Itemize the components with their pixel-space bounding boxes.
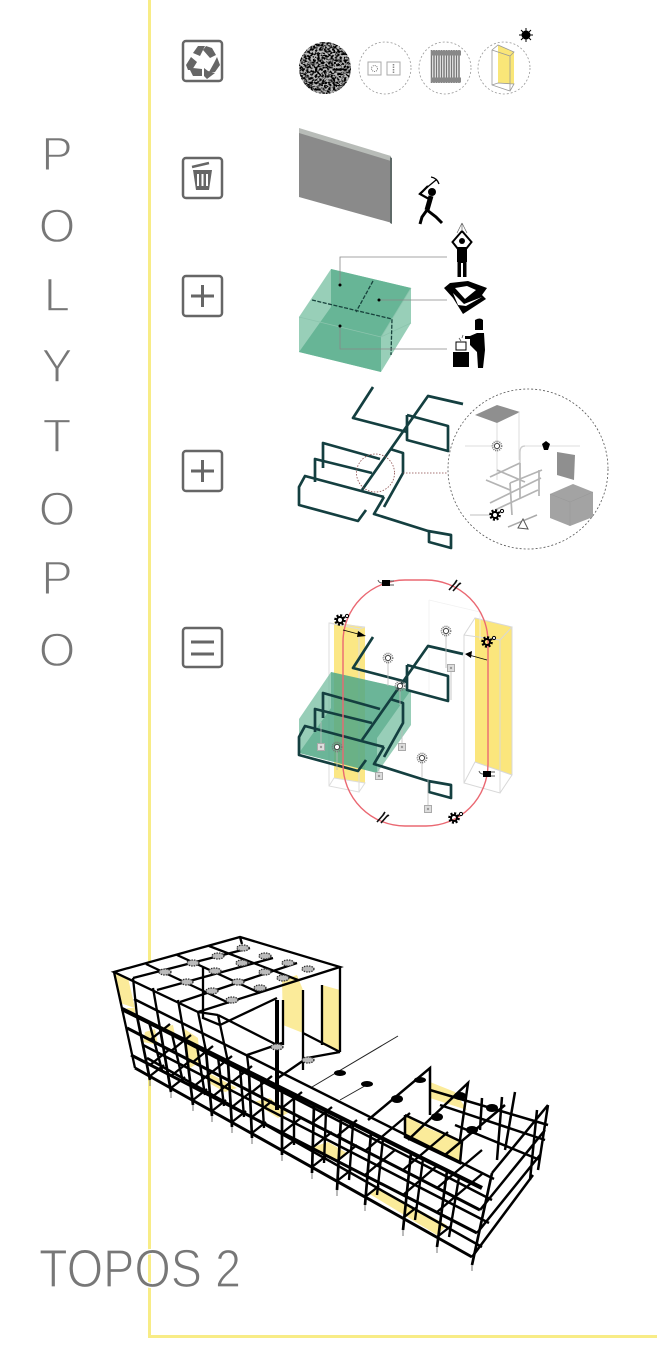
circle: sockets bbox=[359, 42, 411, 94]
icon: worker with pickaxe bbox=[419, 177, 442, 224]
title TOPOS 2: TOPOS 2 bbox=[39, 1239, 241, 1299]
building: roof equipment units bbox=[159, 945, 314, 1063]
combined diagram: red service loop bbox=[343, 580, 488, 826]
vertical title POLYTOPO: T bbox=[43, 409, 71, 462]
yellow frame line bbox=[150, 0, 657, 1336]
building: right wing frame bbox=[368, 1068, 548, 1257]
building: white mask over frame line bbox=[114, 937, 340, 1076]
green program volume with leader lines bbox=[299, 257, 447, 372]
combined diagram: green volume bbox=[299, 672, 411, 773]
building: roof grid bbox=[114, 937, 340, 1068]
building axonometric bbox=[114, 937, 548, 1271]
circle: radiator bbox=[419, 42, 471, 94]
combined diagram: pipe network bbox=[299, 637, 463, 798]
building: upper block columns bbox=[133, 978, 340, 1078]
combined diagram: service icons bbox=[318, 580, 496, 823]
building: rear columns bbox=[149, 1022, 459, 1237]
building: column stubs bbox=[150, 1080, 472, 1271]
vertical title POLYTOPO: P bbox=[41, 127, 73, 180]
dashed detail connector bbox=[356, 454, 448, 492]
pipe network bbox=[299, 387, 463, 548]
circle: solar column bbox=[478, 42, 530, 94]
icon: plus bbox=[183, 276, 222, 316]
building: main level beams bbox=[122, 1009, 482, 1188]
vertical title POLYTOPO: P bbox=[41, 551, 73, 604]
icon: recycle bbox=[183, 41, 222, 81]
building: front columns bbox=[137, 1016, 492, 1265]
vertical title POLYTOPO: Y bbox=[41, 339, 73, 392]
building: cross depth beams bbox=[150, 1024, 482, 1237]
circle: recycled material texture bbox=[298, 41, 352, 95]
icon: sun bbox=[519, 28, 533, 42]
building: yellow panels bbox=[114, 972, 467, 1235]
detail circle: node inset bbox=[448, 389, 608, 549]
vertical title POLYTOPO: O bbox=[39, 482, 75, 535]
icon: trash bbox=[183, 158, 222, 198]
icon: open box bbox=[444, 281, 487, 314]
wall being demolished bbox=[299, 128, 392, 224]
icon: plus second bbox=[183, 451, 222, 491]
building: rear rail plane bbox=[134, 999, 494, 1247]
icon: electrician person bbox=[452, 223, 472, 277]
vertical title POLYTOPO: L bbox=[44, 268, 70, 321]
icon: equals bbox=[183, 628, 222, 667]
vertical title POLYTOPO bbox=[39, 127, 75, 676]
vertical title POLYTOPO: O bbox=[39, 623, 75, 676]
combined diagram: yellow service columns bbox=[329, 600, 512, 793]
vertical title POLYTOPO: O bbox=[39, 199, 75, 252]
icon: chef with pot bbox=[453, 318, 485, 368]
